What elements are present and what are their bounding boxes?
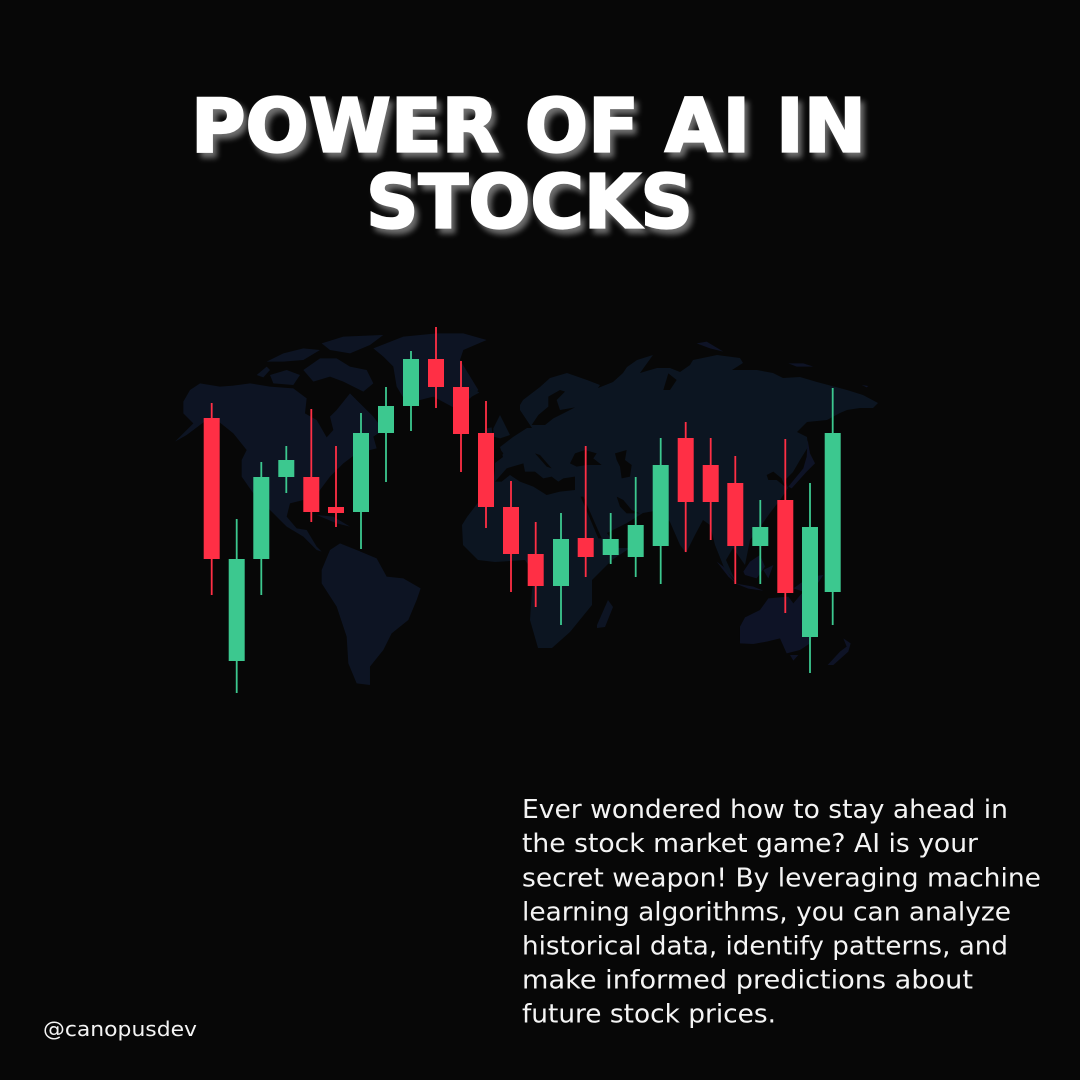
body paragraph: secret weapon! By leveraging machine: [522, 864, 1041, 894]
map: Southeast Asia and Oceania: [717, 555, 851, 665]
map: UK and Iceland: [468, 388, 510, 438]
handle: @canopusdev: [43, 1017, 197, 1041]
title: STOCKS: [366, 160, 693, 246]
world map: [175, 333, 878, 685]
title: [191, 84, 866, 246]
body paragraph: Ever wondered how to stay ahead in: [522, 795, 1008, 825]
map: inland seas: [493, 390, 640, 538]
body paragraph: future stock prices.: [522, 1000, 776, 1030]
map: Afro-Eurasia: [462, 355, 878, 648]
map: Siberian islands, Japan, Korea sea: [663, 342, 868, 488]
map: Madagascar: [597, 600, 613, 628]
body paragraph: historical data, identify patterns, and: [522, 932, 1008, 962]
body paragraph: the stock market game? AI is your: [522, 829, 979, 859]
green candles: [229, 351, 841, 693]
title: POWER OF AI IN: [191, 84, 866, 170]
map: Americas: [175, 333, 487, 685]
red candles: [204, 327, 793, 613]
candlestick chart: [204, 327, 841, 693]
body paragraph: make informed predictions about: [522, 966, 973, 996]
body paragraph: [522, 795, 1041, 1030]
body paragraph: learning algorithms, you can analyze: [522, 898, 1011, 928]
